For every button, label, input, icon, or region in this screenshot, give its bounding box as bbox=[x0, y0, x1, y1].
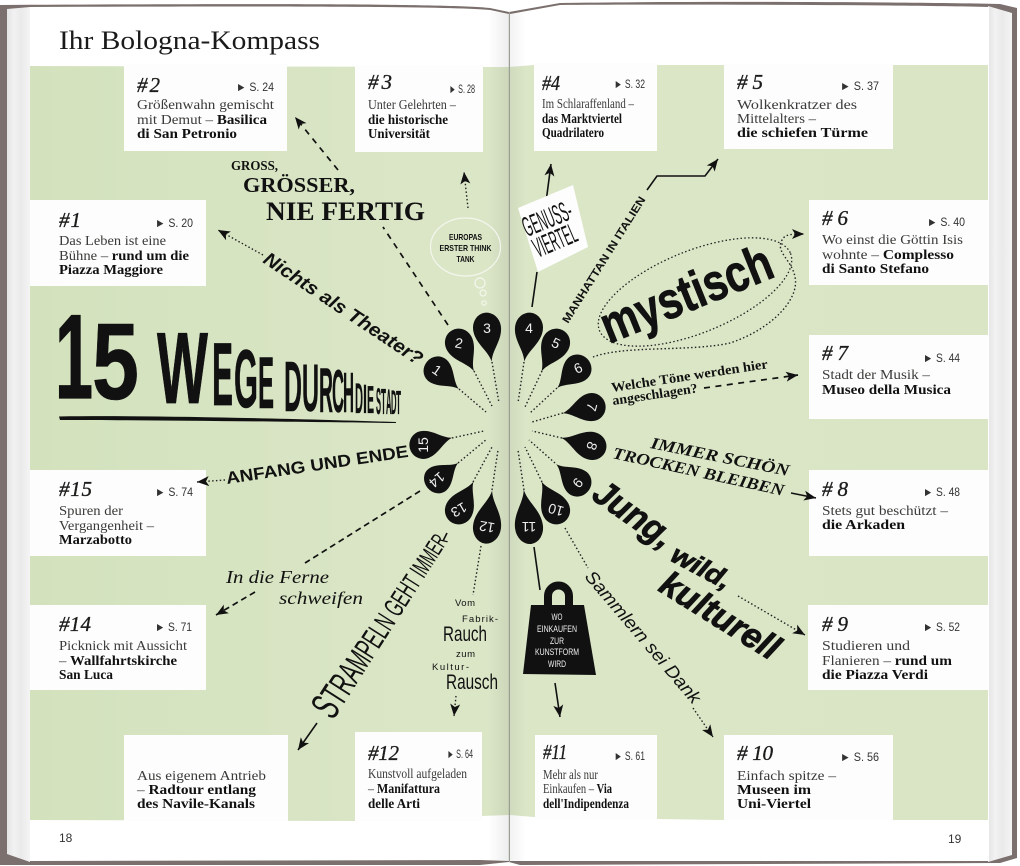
panel: #15 Marzabotto: Spuren der bbox=[59, 504, 123, 519]
pin 1 bbox=[418, 351, 468, 399]
panel: #1 Piazza Maggiore: #1 bbox=[59, 208, 81, 232]
panel: #15 Marzabotto bbox=[30, 470, 206, 556]
panel: #4 Quadrilatero: Im Schlaraffenland – bbox=[542, 97, 635, 112]
pin 11: 11 bbox=[522, 519, 536, 535]
panel: #14 San Luca: ► S. 71 bbox=[155, 620, 192, 634]
pin 6: 6 bbox=[571, 359, 585, 377]
pin 5: 5 bbox=[549, 334, 563, 352]
route 14: In die Ferne schweifen: In die Ferne bbox=[225, 567, 329, 587]
panel: #6 Santo Stefano: di Santo Stefano bbox=[822, 262, 929, 277]
panel: #10 Uni-Viertel: Einfach spitze – bbox=[737, 769, 837, 784]
panel: #11 Via dell'Indipendenza bbox=[535, 735, 657, 820]
panel: #2 Basilica di San Petronio: #2 bbox=[137, 73, 160, 97]
headline: 15 Wege durch die Stadt: E bbox=[258, 343, 274, 424]
panel: #4 Quadrilatero: Quadrilatero bbox=[542, 126, 604, 141]
route 12: Vom Fabrik-Rauch zum Kultur-Rausch bbox=[432, 546, 498, 716]
panel: #7 Museo della Musica: # 7 bbox=[822, 341, 850, 365]
panel: #15 Marzabotto: Vergangenheit – bbox=[59, 519, 155, 534]
headline: 15 Wege durch die Stadt: A bbox=[386, 383, 392, 422]
headline: 15 Wege durch die Stadt bbox=[55, 290, 401, 427]
panel: #9 Piazza Verdi: ► S. 52 bbox=[923, 620, 960, 634]
panel: #7 Museo della Musica: Museo della Musica bbox=[822, 383, 951, 398]
headline: 15 Wege durch die Stadt: W bbox=[157, 313, 208, 425]
panel: #8 Arkaden: # 8 bbox=[822, 477, 848, 501]
panel: #2 Basilica di San Petronio bbox=[124, 64, 287, 151]
route 12: Vom Fabrik-Rauch zum Kultur-Rausch: Rauch bbox=[443, 623, 487, 646]
panel: #12 Manifattura delle Arti bbox=[355, 732, 482, 821]
route 2: Gross, grösser, nie fertig: GRÖSSER, bbox=[243, 173, 355, 197]
panel: #9 Piazza Verdi: die Piazza Verdi bbox=[822, 668, 928, 683]
pin 9: 9 bbox=[569, 475, 587, 491]
book spread: D bbox=[391, 384, 396, 422]
route 5: Manhattan in Italien: MANHATTAN IN ITALIEN bbox=[560, 195, 648, 326]
panel: #13 Navile-Kanal: Aus eigenem Antrieb bbox=[137, 769, 266, 784]
panel: #13 Navile-Kanal: des Navile-Kanals bbox=[137, 797, 256, 812]
book spread: T bbox=[396, 384, 401, 421]
route 3: thought bubble Europas erster Think Tank: TANK bbox=[456, 254, 475, 264]
route 9: Jung, wild, kulturell bbox=[585, 471, 805, 668]
panel: #10 Uni-Viertel: ► S. 56 bbox=[840, 750, 879, 764]
gutter shadow bbox=[488, 12, 526, 862]
route 12: Vom Fabrik-Rauch zum Kultur-Rausch: zum bbox=[456, 649, 475, 660]
route 15: Anfang und Ende: ANFANG UND ENDE bbox=[225, 442, 410, 488]
route 11: weight icon: ZUR bbox=[550, 636, 564, 647]
panel: #2 Basilica di San Petronio: Größenwahn gemischt bbox=[137, 98, 274, 113]
route 4: Genuss-Viertel sign: VIERTEL bbox=[528, 217, 582, 264]
panel: #10 Uni-Viertel bbox=[724, 735, 893, 820]
panel: #3 historische Universität: Unter Gelehrten – bbox=[368, 98, 457, 113]
panel: #7 Museo della Musica bbox=[809, 335, 988, 419]
route 4: Genuss-Viertel sign: GENUSS- bbox=[518, 195, 577, 243]
compass pins 1-15 bbox=[406, 311, 610, 546]
route 11: weight icon: WIRD bbox=[548, 659, 566, 670]
panel: #10 Uni-Viertel: Uni-Viertel bbox=[737, 797, 811, 812]
panel: #5 schiefe Türme bbox=[724, 64, 893, 149]
pin 14 bbox=[419, 452, 467, 499]
panel: #1 Piazza Maggiore: Das Leben ist eine bbox=[59, 234, 166, 249]
route 13: Strampeln geht immer: STRAMPELN GEHT IMMER bbox=[302, 521, 456, 726]
pin 13: 13 bbox=[448, 499, 470, 521]
panel: #1 Piazza Maggiore: Piazza Maggiore bbox=[59, 263, 163, 278]
route 1: Nichts als Theater? bbox=[218, 230, 427, 370]
panel: #15 Marzabotto: Marzabotto bbox=[59, 533, 132, 548]
right page bbox=[510, 5, 989, 861]
panel: #3 historische Universität bbox=[355, 65, 483, 152]
left page bbox=[30, 6, 509, 861]
route 7: Welche Töne werden hier angeschlagen?: angeschlagen? bbox=[611, 380, 698, 408]
panel: #6 Santo Stefano: wohnte – Complesso bbox=[822, 248, 954, 263]
pin 2: 2 bbox=[454, 334, 464, 352]
panel: #1 Piazza Maggiore bbox=[30, 200, 206, 286]
pin 3 bbox=[471, 311, 506, 364]
panel: #5 schiefe Türme: die schiefen Türme bbox=[737, 126, 868, 141]
route 9: Jung, wild, kulturell: kulturell bbox=[653, 564, 788, 668]
route 8: Immer schön trocken bleiben: IMMER SCHÖN bbox=[648, 433, 792, 480]
panel: #9 Piazza Verdi: Flanieren – rund um bbox=[822, 654, 952, 669]
route 3: thought bubble Europas erster Think Tank: ERSTER THINK bbox=[440, 243, 492, 253]
route 3: thought bubble Europas erster Think Tank bbox=[430, 172, 500, 305]
route 7: Welche Töne werden hier angeschlagen?: Welche Töne werden hier bbox=[610, 356, 769, 395]
panel: #11 Via dell'Indipendenza: Einkaufen – Via bbox=[543, 782, 612, 797]
panel: #5 schiefe Türme: ► S. 37 bbox=[840, 79, 879, 93]
route 11: weight icon: EINKAUFEN bbox=[537, 624, 577, 635]
route 14: In die Ferne schweifen bbox=[216, 491, 420, 615]
dotted rays from compass centre bbox=[452, 362, 563, 490]
panel: #14 San Luca: – Wallfahrtskirche bbox=[58, 654, 177, 669]
headline: 15 Wege durch die Stadt: H bbox=[343, 361, 354, 425]
route 1: Nichts als Theater?: Nichts als Theater? bbox=[259, 249, 427, 370]
pin 10 bbox=[529, 475, 575, 529]
route 3: thought bubble Europas erster Think Tank: EUROPAS bbox=[449, 232, 482, 242]
panel: #11 Via dell'Indipendenza: #11 bbox=[543, 740, 567, 764]
panel: #4 Quadrilatero: das Marktviertel bbox=[542, 112, 622, 127]
route 4: Genuss-Viertel sign bbox=[518, 164, 588, 307]
panel: #1 Piazza Maggiore: Bühne – rund um die bbox=[59, 249, 189, 264]
route 7: Welche Töne werden hier angeschlagen? bbox=[610, 356, 798, 408]
pin 7 bbox=[560, 390, 608, 427]
pin 3: 3 bbox=[483, 320, 491, 336]
panel: #8 Arkaden: ► S. 48 bbox=[923, 485, 960, 499]
panel: #2 Basilica di San Petronio: ► S. 24 bbox=[236, 80, 274, 94]
route 12: Vom Fabrik-Rauch zum Kultur-Rausch: Rausch bbox=[446, 671, 498, 694]
panel: #3 historische Universität: ► S. 28 bbox=[449, 82, 475, 96]
panel: #8 Arkaden: Stets gut beschützt – bbox=[822, 504, 949, 519]
page number 19: 19 bbox=[948, 832, 962, 846]
route 10: Sammlern sei Dank bbox=[565, 528, 713, 737]
title: Ihr Bologna-Kompass bbox=[59, 26, 320, 55]
panel: #7 Museo della Musica: ► S. 44 bbox=[923, 351, 960, 365]
panel: #12 Manifattura delle Arti: – Manifattura bbox=[367, 782, 440, 797]
headline: 15 Wege durch die Stadt: S bbox=[376, 381, 381, 422]
panel: #14 San Luca: Picknick mit Aussicht bbox=[59, 639, 187, 654]
pin 12 bbox=[471, 489, 506, 545]
pin 6 bbox=[548, 349, 597, 398]
panel: #7 Museo della Musica: Stadt der Musik – bbox=[822, 368, 931, 383]
pin 15 bbox=[406, 424, 456, 462]
panel: #8 Arkaden: die Arkaden bbox=[822, 518, 905, 533]
route 2: Gross, grösser, nie fertig bbox=[231, 117, 448, 325]
panel: #1 Piazza Maggiore: ► S. 20 bbox=[155, 216, 193, 230]
panel: #4 Quadrilatero bbox=[534, 63, 657, 151]
page edges right bbox=[988, 6, 1012, 862]
pin 4: 4 bbox=[525, 320, 533, 336]
route 11: weight icon: WO bbox=[552, 612, 562, 623]
panel: #12 Manifattura delle Arti: ► S. 64 bbox=[447, 747, 473, 761]
route 8: Immer schön trocken bleiben: TROCKEN BLEIBEN bbox=[611, 443, 787, 500]
route 9: Jung, wild, kulturell: Jung, bbox=[585, 471, 683, 556]
route 5: Manhattan in Italien bbox=[560, 159, 718, 326]
route 12: Vom Fabrik-Rauch zum Kultur-Rausch: Vom bbox=[455, 598, 475, 609]
pin 1: 1 bbox=[429, 361, 445, 379]
panel: #15 Marzabotto: ► S. 74 bbox=[155, 485, 193, 499]
headline: 15 Wege durch die Stadt: I bbox=[363, 376, 367, 422]
route 2: Gross, grösser, nie fertig: GROSS, bbox=[231, 158, 278, 173]
panel: #13 Navile-Kanal: – Radtour entlang bbox=[136, 783, 256, 798]
panel: #14 San Luca: San Luca bbox=[59, 668, 113, 683]
panel: #11 Via dell'Indipendenza: ► S. 61 bbox=[614, 749, 645, 763]
panel: #5 schiefe Türme: # 5 bbox=[737, 70, 763, 94]
headline: 15 Wege durch die Stadt: R bbox=[319, 356, 333, 426]
route 12: Vom Fabrik-Rauch zum Kultur-Rausch: Fabrik- bbox=[462, 614, 498, 625]
panel: #6 Santo Stefano: # 6 bbox=[822, 206, 848, 230]
panel: #13 Navile-Kanal bbox=[124, 735, 288, 821]
pin 7: 7 bbox=[583, 401, 601, 413]
headline: 15 Wege durch die Stadt: C bbox=[332, 358, 344, 425]
panel: #10 Uni-Viertel: # 10 bbox=[737, 741, 774, 765]
headline: 15 Wege durch die Stadt: T bbox=[381, 381, 386, 422]
pin 13 bbox=[440, 475, 486, 529]
panel: #4 Quadrilatero: #4 bbox=[542, 71, 560, 95]
headline: 15 Wege durch die Stadt: E bbox=[212, 324, 233, 424]
panel: #9 Piazza Verdi bbox=[808, 605, 988, 690]
headline underline bbox=[59, 416, 396, 423]
route 8: Immer schön trocken bleiben bbox=[611, 433, 816, 500]
panel: #5 schiefe Türme: Mittelalters – bbox=[737, 112, 817, 127]
panel: #12 Manifattura delle Arti: #12 bbox=[368, 741, 400, 765]
panel: #9 Piazza Verdi: # 9 bbox=[822, 612, 848, 636]
headline: 15 Wege durch die Stadt: D bbox=[284, 348, 302, 427]
pin 11 bbox=[510, 488, 545, 546]
panel: #9 Piazza Verdi: Studieren und bbox=[822, 639, 910, 654]
pin 10: 10 bbox=[546, 500, 566, 520]
headline: 15 Wege durch die Stadt: D bbox=[355, 375, 363, 423]
panel: #3 historische Universität: #3 bbox=[368, 70, 392, 94]
route 2: Gross, grösser, nie fertig: NIE FERTIG bbox=[266, 197, 425, 226]
route 11: weight icon: KUNSTFORM bbox=[535, 647, 579, 658]
headline: 15 Wege durch die Stadt: G bbox=[234, 332, 258, 425]
panel: #3 historische Universität: Universität bbox=[368, 127, 430, 142]
panel: #15 Marzabotto: #15 bbox=[59, 477, 92, 501]
pin 14: 14 bbox=[426, 469, 448, 491]
route 6: mystisch: mystisch bbox=[592, 234, 781, 355]
pin 8: 8 bbox=[583, 440, 601, 453]
panel: #6 Santo Stefano: ► S. 40 bbox=[927, 215, 965, 229]
pin 2 bbox=[440, 324, 486, 378]
panel: #11 Via dell'Indipendenza: dell'Indipendenza bbox=[543, 797, 629, 812]
page number 18: 18 bbox=[59, 831, 73, 845]
panel: #12 Manifattura delle Arti: Kunstvoll aufgeladen bbox=[368, 767, 467, 782]
panel: #3 historische Universität: die historische bbox=[368, 113, 448, 128]
route 11: weight icon bbox=[523, 547, 596, 717]
panel: #2 Basilica di San Petronio: mit Demut – Basilica bbox=[137, 113, 267, 128]
pin 9 bbox=[547, 454, 597, 502]
pin 4 bbox=[510, 311, 545, 364]
route 14: In die Ferne schweifen: schweifen bbox=[279, 588, 363, 608]
headline: 15 Wege durch die Stadt: E bbox=[367, 379, 374, 422]
panel: #5 schiefe Türme: Wolkenkratzer des bbox=[737, 98, 857, 113]
pin 5 bbox=[529, 324, 575, 378]
pin 15: 15 bbox=[415, 437, 431, 453]
panel: #14 San Luca bbox=[30, 605, 206, 690]
route 10: Sammlern sei Dank: Sammlern sei Dank bbox=[581, 567, 706, 708]
headline: 15 Wege durch die Stadt: 1 bbox=[55, 290, 93, 424]
headline: 15 Wege durch die Stadt: U bbox=[302, 351, 319, 426]
headline: 15 Wege durch die Stadt: 5 bbox=[92, 301, 139, 423]
page edges left bbox=[7, 7, 30, 862]
panel: #2 Basilica di San Petronio: di San Petronio bbox=[137, 127, 237, 142]
pin 12: 12 bbox=[478, 518, 496, 536]
route 9: Jung, wild, kulturell: wild, bbox=[666, 539, 737, 595]
panel: #14 San Luca: #14 bbox=[59, 612, 92, 636]
panel: #6 Santo Stefano bbox=[809, 200, 988, 285]
panel: #8 Arkaden bbox=[809, 470, 988, 556]
pin 8 bbox=[557, 424, 610, 463]
panel: #4 Quadrilatero: ► S. 32 bbox=[614, 77, 645, 91]
panel: #11 Via dell'Indipendenza: Mehr als nur bbox=[543, 768, 598, 783]
route 12: Vom Fabrik-Rauch zum Kultur-Rausch: Kultur- bbox=[432, 662, 469, 673]
panel: #12 Manifattura delle Arti: delle Arti bbox=[368, 797, 420, 812]
panel: #6 Santo Stefano: Wo einst die Göttin Isis bbox=[822, 233, 963, 248]
panel: #10 Uni-Viertel: Museen im bbox=[737, 783, 811, 798]
